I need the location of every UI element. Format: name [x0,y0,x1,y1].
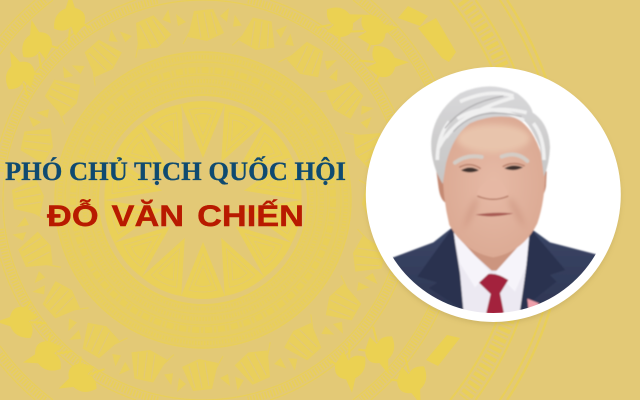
eyelids [459,163,525,169]
title: position: PHÓ CHỦ TỊCH QUỐC HỘI [5,155,346,186]
hair shadows [445,96,522,132]
eyebrows [455,154,527,163]
nose [477,181,508,199]
portrait photo [390,86,599,327]
suit [392,228,596,310]
portrait shadow [367,70,620,324]
portrait frame [366,67,621,322]
lapel [417,227,565,311]
title: name: ĐỖ VĂN CHIẾN [47,199,304,233]
animal ring [0,0,440,400]
shirt [454,232,529,317]
figure ring [11,8,395,392]
ears [436,168,547,203]
face [443,112,545,257]
hair [431,86,550,184]
mouth [475,213,513,216]
pin [527,299,539,309]
nostril shadow [477,196,508,199]
cheek shade [466,200,522,223]
forehead light [457,124,530,152]
collar [454,232,529,292]
neck [454,232,517,272]
tie [479,274,508,318]
outer long figures [398,6,460,366]
centre star triangles [102,101,304,299]
eyes [461,166,523,172]
hair strands [437,93,544,160]
